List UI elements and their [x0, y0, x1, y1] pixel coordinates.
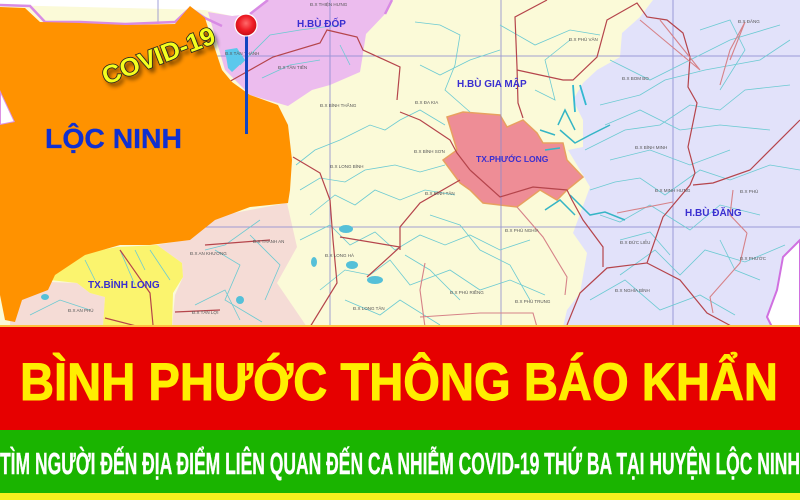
region: TX.Phước Long [443, 112, 583, 207]
small commune labels: Đ.X PHÚ NGHĨA [505, 227, 539, 233]
small commune labels: Đ.X BÌNH SƠN [414, 148, 445, 154]
small commune labels: Đ.X LONG HÀ [325, 252, 354, 258]
small commune labels: Đ.X AN PHÚ [68, 307, 94, 313]
small commune labels: Đ.X TÂN LỢI [192, 309, 219, 315]
small commune labels: Đ.X MINH HƯNG [655, 188, 691, 193]
grid lines [158, 0, 800, 327]
small commune labels: Đ.X BÌNH THẮNG [320, 101, 357, 108]
label: COVID-19 shadow: COVID-19 [101, 26, 222, 95]
region: south-west pink district [10, 282, 105, 327]
label: TX.Phước Long: TX.PHƯỚC LONG [476, 153, 549, 164]
label: H.Bù Gia Mập: H.BÙ GIA MẬP [457, 77, 527, 90]
small commune labels: Đ.X BOM BO [622, 76, 649, 81]
small commune labels: Đ.X NGHĨA BÌNH [615, 287, 650, 293]
small commune labels: Đ.X LONG TÂN [353, 305, 385, 311]
small commune labels: Đ.X PHÚ VĂN [569, 36, 598, 42]
small commune labels: Đ.X BÌNH TÂN [425, 190, 455, 196]
label: Lộc Ninh: LỘC NINH [45, 122, 182, 154]
region: bottom right white corner [767, 240, 800, 327]
small commune labels: Đ.X THANH AN [253, 239, 284, 244]
label: H.Bù Đốp: H.BÙ ĐỐP [297, 16, 346, 30]
region: southern pink district [157, 203, 307, 327]
district borders [0, 0, 392, 26]
label: COVID-19: COVID-19 [98, 22, 219, 91]
map labels [88, 16, 742, 291]
small commune labels: Đ.X PHƯỚC [740, 255, 767, 261]
small commune labels: Đ.X LONG BÌNH [330, 163, 364, 169]
small commune labels: Đ.X ĐA KIA [415, 100, 438, 105]
region: H.Bù Đăng [563, 0, 800, 327]
region: left notch [0, 90, 15, 125]
small commune labels: Đ.X THIỆN HƯNG [310, 0, 348, 7]
small commune labels: Đ.X ĐỨC LIỄU [620, 239, 650, 245]
map background [0, 0, 800, 330]
banner: green subheading [0, 430, 800, 493]
label: TX.Bình Long: TX.BÌNH LONG [88, 278, 160, 291]
region: H.Bù Đốp [208, 0, 392, 106]
lakes [41, 225, 383, 304]
small commune labels: Đ.X BÌNH MINH [635, 144, 667, 150]
region: TX.Bình Long [50, 245, 183, 327]
orange highlight: Lộc Ninh district [0, 6, 292, 322]
small commune labels: Đ.X ĐĂNG [738, 18, 760, 24]
small commune labels [68, 0, 767, 315]
region: top white area [0, 0, 270, 16]
roads [105, 0, 800, 327]
bottom yellow strip [0, 493, 800, 500]
rivers [30, 20, 800, 325]
location pin head [235, 14, 257, 36]
lake [225, 48, 245, 72]
small commune labels: Đ.X TÂN THÀNH [225, 50, 259, 56]
small commune labels: Đ.X PHÚ RIỀNG [450, 289, 484, 295]
small commune labels: Đ.X PHÚ [740, 188, 758, 194]
banner: red headline [0, 325, 800, 430]
small commune labels: Đ.X AN KHƯƠNG [190, 251, 227, 256]
small commune labels: Đ.X TÂN TIẾN [278, 64, 307, 70]
small commune labels: Đ.X PHÚ TRUNG [515, 298, 551, 304]
location pin line [245, 36, 248, 134]
label: H.Bù Đăng: H.BÙ ĐĂNG [685, 206, 742, 219]
minor roads [420, 20, 747, 327]
